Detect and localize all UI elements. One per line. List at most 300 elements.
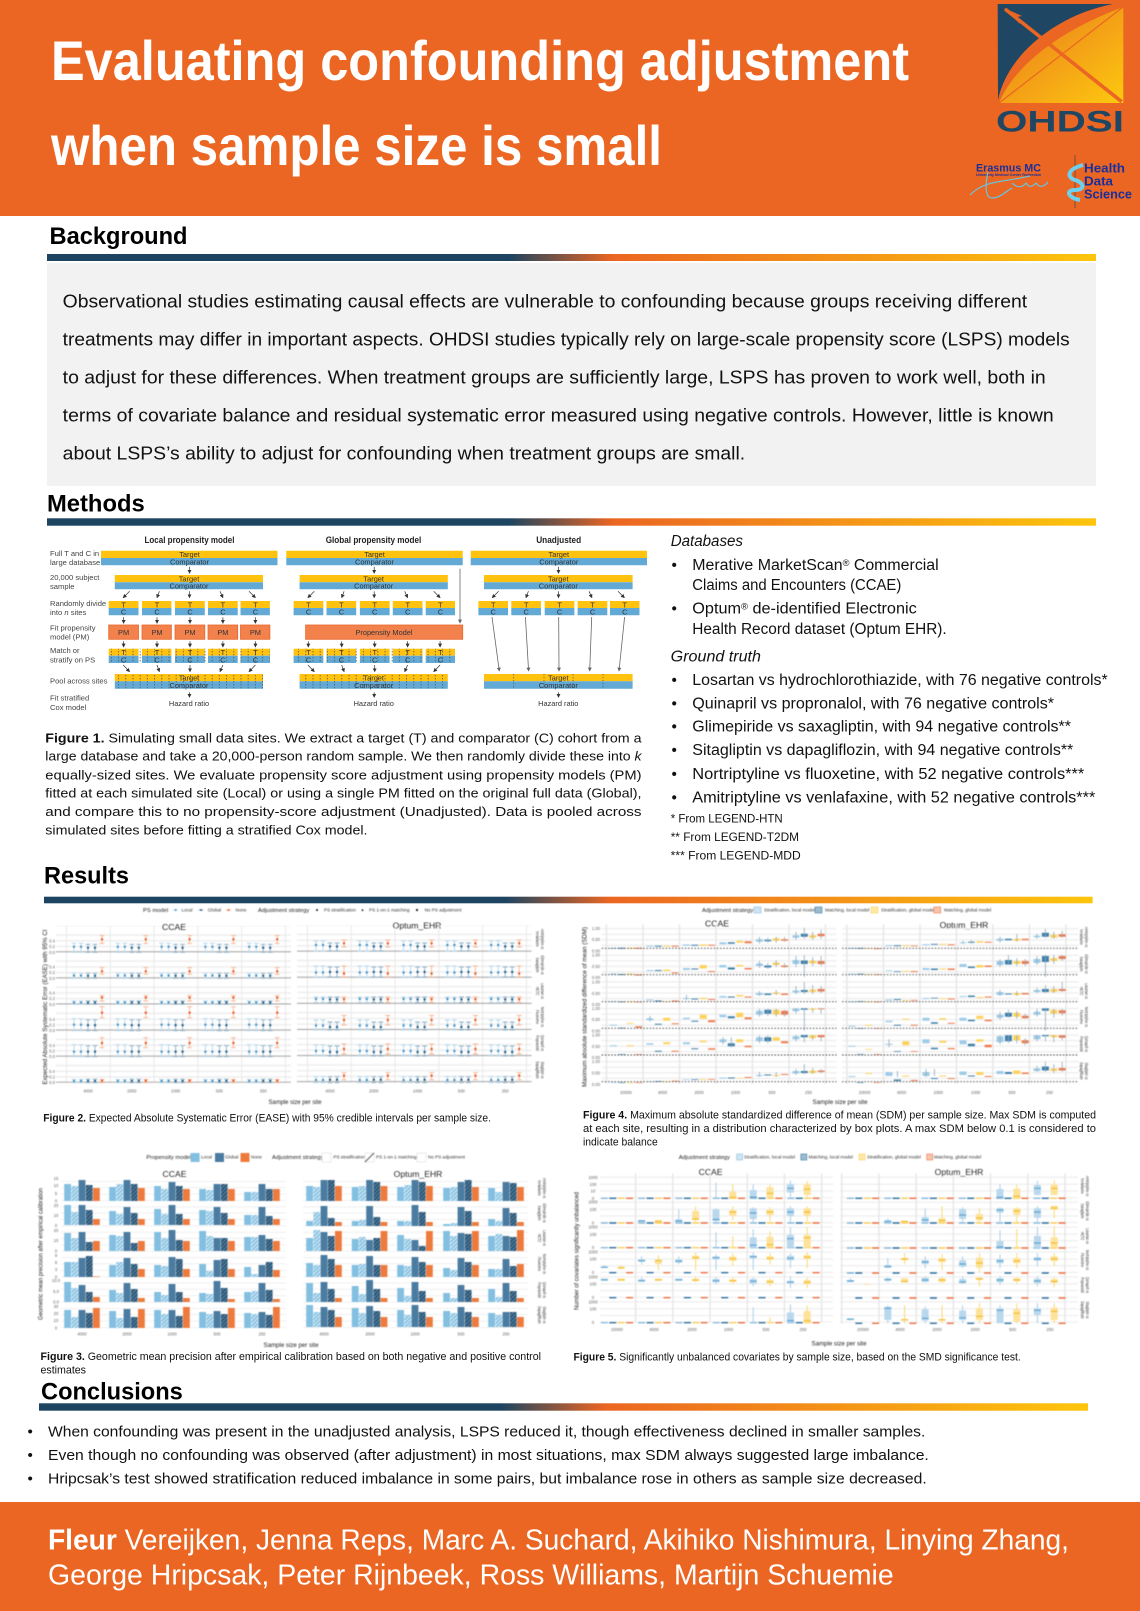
databases and ground truth list: Optum	[692, 601, 738, 618]
axis tick labels: 4000	[897, 1090, 907, 1095]
bar labels: C	[187, 608, 193, 617]
bar labels: Target	[548, 574, 569, 584]
bar labels: Target	[179, 550, 200, 559]
bar labels: T	[405, 648, 410, 657]
axis tick labels: 5.0	[53, 1289, 60, 1294]
bar labels: T	[623, 600, 628, 610]
bar labels: Target	[179, 574, 199, 584]
axis titles: Maximum absolute standardized difference of mean (SDM)	[582, 927, 588, 1087]
axis tick labels: 1000	[588, 1300, 598, 1304]
legend: No PS adjustment	[425, 908, 462, 913]
footer authors: George Hripcsak, Peter Rijnbeek, Ross Williams, Martijn Schuemie	[48, 1559, 894, 1591]
legend: Adjustment strategy	[679, 1155, 730, 1161]
axis tick labels: 4000	[658, 1090, 668, 1095]
facet strip labels: Dapagliflozin	[535, 1061, 540, 1079]
axis tick labels: 0.50	[592, 937, 601, 942]
legend: PS 1-on-1 matching	[369, 908, 410, 913]
panel: background text: terms of covariate balance and residual systematic error measured using negative controls. However, little is known	[63, 404, 1054, 425]
figure 4 caption	[583, 1109, 1096, 1149]
bar labels: C	[372, 608, 378, 617]
figure 3: precision bar chart: Optum_EHR	[394, 1169, 442, 1179]
legend: Matching, local model	[825, 908, 869, 913]
databases and ground truth list: Losartan vs hydrochlorothiazide, with 76 negative controls*	[692, 672, 1108, 689]
logo: Health Data Science	[1069, 155, 1132, 208]
axis tick labels: 0	[592, 1270, 595, 1275]
legend	[143, 908, 462, 914]
facet strip labels	[1079, 927, 1089, 1080]
legend: Global	[208, 908, 221, 913]
axis tick labels: 2000	[934, 1090, 944, 1095]
CCAE boxes	[613, 928, 821, 1083]
facet strip labels: Amitriptyline vs	[1084, 927, 1089, 947]
axis tick labels: 1.00	[592, 926, 601, 931]
axis tick labels: 1000	[171, 1088, 181, 1094]
axis tick labels: 20	[54, 1203, 59, 1208]
axis tick labels: 100	[590, 1232, 597, 1237]
axis tick labels: 0	[55, 1326, 58, 1330]
step labels	[50, 549, 108, 712]
databases and ground truth list: •	[672, 695, 677, 712]
facet strip labels: Amitriptyline vs	[542, 1178, 547, 1198]
axis tick labels: 0.4	[49, 1069, 56, 1074]
conclusions list: •	[28, 1424, 33, 1441]
figure 3 caption	[40, 1351, 541, 1376]
facet titles: CCAE	[162, 922, 186, 932]
facet strip labels: Saxagliptin	[1080, 1204, 1085, 1218]
databases and ground truth list: Health Record dataset (Optum EHR).	[692, 621, 947, 638]
bar labels: T	[339, 600, 344, 610]
axis tick labels: 250	[1046, 1090, 1054, 1095]
facet strip labels: Sitagliptin vs	[542, 1306, 547, 1324]
bar labels: C	[121, 608, 127, 617]
axis titles: Sample size per site	[268, 1099, 322, 1106]
bar labels: Comparator	[169, 681, 209, 690]
panel titles: Unadjusted	[536, 535, 581, 545]
axis titles: Sample size per site	[812, 1099, 868, 1106]
axis tick labels: 0.00	[592, 975, 601, 980]
bar labels: T	[438, 648, 443, 657]
plot backgrounds	[61, 1176, 528, 1328]
axis tick labels: 100	[590, 1306, 597, 1312]
databases and ground truth list: Merative MarketScan	[692, 557, 838, 574]
bar labels: Hazard ratio	[538, 699, 578, 708]
step labels: 20,000 subject	[50, 573, 100, 582]
axis tick labels: 250	[1046, 1327, 1054, 1332]
bar labels: T	[438, 600, 443, 610]
Optum_EHR bars	[310, 1180, 520, 1327]
axis tick labels: 10.0	[52, 1278, 61, 1283]
logo: Health Data Science: Data	[1084, 174, 1114, 188]
legend: Matching, local model	[808, 1155, 853, 1160]
facet strip labels: Amitriptyline vs	[1085, 1176, 1090, 1196]
axis tick labels: 0	[592, 1196, 595, 1201]
axis tick labels: 0.0	[53, 1300, 60, 1304]
bar labels: C	[339, 608, 345, 617]
figure 1 caption: large database and take a 20,000-person random sample. We then randomly divide these into k	[45, 749, 643, 764]
axis tick labels: 10	[54, 1318, 59, 1323]
flow arrows	[123, 567, 625, 697]
bar labels: PM	[250, 628, 261, 637]
databases and ground truth list: •	[672, 601, 677, 618]
step labels: large database	[50, 558, 100, 567]
bar labels: Hazard ratio	[169, 699, 209, 708]
facet strip labels: Losartan vs	[1085, 1228, 1090, 1244]
databases and ground truth list: •	[672, 766, 677, 783]
axis tick labels: 0.4	[49, 964, 56, 970]
legend: Adjustment strategy	[272, 1155, 323, 1161]
axis tick labels: 2000	[122, 1332, 132, 1336]
axis tick labels: 0.2	[49, 1074, 56, 1080]
axis tick labels: 0	[592, 1245, 595, 1250]
facet strip labels: Dapagliflozin	[1079, 1062, 1084, 1080]
axis tick labels: 0.00	[592, 1002, 601, 1007]
facet strip labels: Sitagliptin vs	[1084, 1062, 1089, 1080]
logo: OHDSI	[996, 4, 1124, 138]
logo: Health Data Science: Health	[1084, 162, 1125, 176]
axis titles	[574, 1192, 867, 1348]
axis tick labels: 500	[768, 1090, 776, 1095]
axis tick labels: 0.2	[49, 996, 56, 1001]
axis tick labels: 5	[55, 1191, 58, 1196]
step labels: Randomly divide	[50, 599, 106, 608]
facet titles: CCAE	[705, 918, 729, 928]
bar labels: C	[154, 655, 160, 664]
facet strip labels: Saxagliptin	[1079, 957, 1084, 971]
axis tick labels: 4000	[77, 1332, 87, 1336]
legend: PS stratification	[324, 908, 356, 913]
databases and ground truth list: Quinapril vs propronalol, with 76 negative controls*	[692, 695, 1054, 712]
axis tick labels: 20	[54, 1311, 59, 1316]
CCAE boxes	[601, 1181, 820, 1323]
facet strip labels: Venlafaxine	[1080, 1178, 1085, 1194]
legend	[679, 1154, 981, 1161]
axis tick labels: 1.00	[592, 1032, 601, 1038]
facet strip labels: Glimepiride vs	[1084, 954, 1089, 974]
facet strip labels: HCTZ	[1080, 1232, 1085, 1241]
bar labels: T	[121, 600, 126, 610]
bar labels: T	[253, 600, 258, 610]
axis tick labels: 100	[590, 1182, 597, 1187]
axis tick labels: 1000	[588, 1274, 598, 1280]
axis titles	[38, 1188, 319, 1349]
bar labels: T	[491, 600, 496, 610]
databases and ground truth list: Ground truth	[671, 649, 761, 666]
axis tick labels	[588, 1175, 1054, 1332]
Optum_EHR boxes	[852, 929, 1062, 1083]
bar labels: Comparator	[539, 558, 579, 566]
databases and ground truth list: Databases	[671, 533, 743, 550]
panel titles	[144, 535, 581, 545]
axis tick labels: 1.00	[592, 980, 601, 984]
facet strip labels: Saxagliptin	[535, 958, 540, 972]
axis tick labels: 500	[1009, 1327, 1017, 1332]
legend: PS model	[143, 908, 168, 914]
axis tick labels: 20000	[859, 1090, 871, 1095]
bar labels: Propensity Model	[355, 628, 413, 637]
figure 5 caption: Figure 5. Significantly unbalanced covariates by sample size, based on the SMD significance test.	[574, 1352, 1021, 1364]
panel titles: Local propensity model	[144, 535, 234, 545]
legend: Matching, global model	[934, 1155, 981, 1160]
facet strip labels	[537, 1178, 547, 1324]
axis tick labels: 0.4	[49, 1017, 56, 1022]
axis tick labels: 100	[590, 1282, 597, 1286]
bar labels: T	[155, 600, 160, 610]
bar labels: C	[187, 655, 193, 664]
step labels: Match or	[50, 646, 80, 655]
axis tick labels: 0	[592, 1295, 595, 1300]
axis tick labels: 0.2	[49, 1022, 56, 1028]
databases and ground truth list: * From LEGEND-HTN	[671, 811, 783, 825]
axis tick labels: 500	[458, 1332, 465, 1336]
bar labels: C	[121, 655, 127, 664]
step labels: Fit propensity	[50, 624, 96, 632]
facet strip labels: Propranolol	[535, 1035, 540, 1051]
panel: background text	[47, 263, 1096, 486]
facet strip labels: Venlafaxine	[1079, 929, 1084, 945]
facet strip labels: Venlafaxine	[535, 931, 540, 947]
bar labels: C	[253, 608, 259, 617]
axis tick labels: 250	[260, 1088, 267, 1094]
facet strip labels: Quinapril vs	[540, 1035, 545, 1051]
bar labels: Target	[548, 674, 569, 682]
figure 2: EASE error bars: Optum_EHR	[393, 920, 441, 930]
axis tick labels: 30	[54, 1304, 59, 1309]
step labels: Cox model	[50, 703, 87, 712]
axis tick labels: 2000	[687, 1327, 697, 1332]
title	[50, 29, 909, 177]
databases and ground truth list: Amitriptyline vs venlafaxine, with 52 negative controls***	[692, 789, 1095, 806]
figure 3 caption: Figure 3. Geometric mean precision after empirical calibration based on both negative and positive control	[40, 1351, 541, 1363]
facet strip labels	[1080, 1176, 1090, 1319]
axis tick labels: 0.00	[592, 1055, 601, 1060]
plot backgrounds	[600, 1173, 1078, 1323]
axis tick labels: 0.50	[592, 1017, 601, 1022]
facet strip labels: Glimepiride vs	[542, 1203, 547, 1223]
facet strip labels: Dapagliflozin	[537, 1306, 542, 1324]
bar labels: Comparator	[354, 582, 394, 591]
axis tick labels: 1000	[971, 1090, 981, 1095]
facet strip labels: HCTZ	[537, 1234, 542, 1243]
axis tick labels: 2000	[369, 1088, 379, 1094]
axis tick labels: 500	[216, 1088, 224, 1094]
figure 1 caption	[45, 731, 643, 837]
axis tick labels: 0.00	[592, 948, 601, 954]
axis tick labels: 10	[54, 1238, 59, 1243]
legend	[702, 907, 991, 914]
axis tick labels	[592, 926, 1054, 1095]
axis tick labels: 10	[54, 1183, 59, 1188]
figure 3: precision bar chart	[38, 1153, 547, 1349]
axis titles	[582, 927, 868, 1106]
axis tick labels: 1000	[588, 1200, 598, 1204]
step labels: Fit stratified	[50, 694, 89, 702]
bar labels: Target	[363, 574, 384, 584]
bar labels: Comparator	[539, 582, 578, 591]
axis tick labels: 0.0	[49, 1028, 56, 1033]
bar labels: T	[121, 648, 126, 657]
bar labels: PM	[151, 628, 163, 637]
databases and ground truth list: •	[672, 742, 677, 759]
legend: Global	[225, 1155, 238, 1160]
axis tick labels: 1000	[970, 1327, 980, 1332]
axis titles: Number of covariates significantly unbalanced	[574, 1192, 580, 1310]
conclusions list: Even though no confounding was observed (after adjustment) in most situations, max SDM always suggested large imbalance.	[48, 1447, 929, 1464]
axis tick labels: 0.0	[49, 950, 56, 955]
bar labels: C	[405, 608, 411, 617]
axis tick labels: 1.00	[592, 952, 601, 958]
figure 2: EASE error bars	[42, 908, 545, 1106]
axis tick labels: 3	[55, 1267, 58, 1272]
axis tick labels: 0.2	[49, 1048, 56, 1054]
Optum_EHR error bars	[314, 940, 522, 1083]
legend	[146, 1153, 466, 1162]
bar labels	[118, 550, 628, 708]
facet strip labels: Dapagliflozin	[1080, 1301, 1085, 1319]
bar labels: T	[372, 648, 377, 657]
bar labels: C	[491, 608, 497, 617]
axis tick labels: 1000	[410, 1332, 420, 1336]
axis tick labels: 0.4	[49, 1043, 56, 1048]
databases and ground truth list: •	[672, 672, 677, 689]
conclusions list: •	[28, 1447, 33, 1464]
axis tick labels: 500	[1008, 1090, 1016, 1095]
axis titles: Geometric mean precision after empirical calibration	[38, 1188, 44, 1320]
axis tick labels: 2000	[127, 1088, 137, 1094]
bar labels: C	[306, 608, 312, 617]
axis tick labels: 0.00	[592, 1028, 601, 1034]
figure 2 caption: Figure 2. Expected Absolute Systematic Error (EASE) with 95% credible intervals per sample size.	[43, 1113, 491, 1125]
facet strip labels	[535, 929, 545, 1079]
databases and ground truth list: ®	[741, 602, 748, 612]
bar labels: C	[306, 655, 312, 664]
bar labels: T	[306, 600, 311, 610]
figure 4 caption: Figure 4. Maximum absolute standardized difference of mean (SDM) per sample size. Max SDM is computed	[583, 1109, 1096, 1121]
facet strip labels: HCTZ	[535, 987, 540, 996]
axis tick labels: 0.00	[592, 1082, 601, 1087]
axis tick labels: 2000	[932, 1327, 942, 1332]
axis tick labels: 0.2	[49, 970, 56, 975]
databases and ground truth list: •	[672, 789, 677, 806]
title: Evaluating confounding adjustment	[51, 29, 909, 92]
legend: Matching, global model	[944, 908, 991, 913]
bar labels: Comparator	[170, 558, 210, 566]
bar labels: C	[405, 655, 411, 664]
facet titles: CCAE	[163, 1169, 187, 1179]
axis tick labels: 15	[54, 1176, 59, 1181]
legend: Stratification, local model	[744, 1155, 795, 1160]
heading: Results: Results	[44, 862, 129, 889]
axis tick labels: 10	[54, 1213, 59, 1218]
facet strip labels: Glimepiride vs	[1085, 1201, 1090, 1221]
target and comparator bars	[101, 551, 647, 689]
figure 1 caption: and compare this to no propensity-score adjustment (Unadjusted). Data is pooled across	[45, 804, 642, 819]
axis tick labels: 9	[55, 1253, 58, 1258]
legend: Adjustment strategy	[258, 908, 309, 914]
bar labels: Target	[364, 550, 385, 559]
bar labels: T	[221, 600, 226, 610]
panel: background text: about LSPS’s ability to adjust for confounding when treatment groups are small.	[63, 442, 745, 463]
bar labels: C	[220, 608, 226, 617]
axis titles: Sample size per site	[264, 1342, 319, 1349]
axis tick labels: 1000	[588, 1175, 598, 1180]
facet strip labels: Nortriptyline vs	[540, 1007, 545, 1027]
propensity model boxes	[109, 625, 463, 639]
databases and ground truth list: •	[672, 719, 677, 736]
heading: Methods: Methods	[47, 491, 145, 518]
figure 1: simulation flow diagram	[50, 535, 647, 712]
panel: background text: Observational studies estimating causal effects are vulnerable to confounding because groups receiving different	[63, 290, 1027, 311]
axis tick labels: 10	[591, 1188, 596, 1194]
facet strip labels: Quinapril vs	[1085, 1277, 1090, 1293]
bar labels: T	[253, 648, 258, 657]
panel titles: Global propensity model	[326, 535, 421, 545]
databases and ground truth list: •	[672, 557, 677, 574]
axis tick labels: 500	[762, 1327, 770, 1332]
axis tick labels: 0	[55, 1198, 58, 1204]
facet strip labels: Venlafaxine	[537, 1180, 542, 1196]
plot backgrounds	[602, 924, 1079, 1084]
bar labels: PM	[118, 628, 129, 637]
legend: No PS adjustment	[428, 1155, 466, 1160]
facet strip labels: Nortriptyline vs	[1084, 1007, 1089, 1027]
figure 1 caption: equally-sized sites. We evaluate propensity score adjustment using propensity models (PM)	[45, 767, 642, 782]
axis tick labels: 4000	[325, 1088, 335, 1094]
axis tick labels: 1000	[588, 1250, 598, 1254]
axis tick labels: 20	[54, 1228, 59, 1233]
databases and ground truth list: *** From LEGEND-MDD	[671, 849, 801, 863]
axis tick labels: 250	[258, 1332, 266, 1336]
logo: Erasmus MC: University Medical Center Rotterdam	[976, 173, 1041, 177]
bar labels: Target	[179, 674, 199, 682]
axis tick labels: 2000	[694, 1090, 704, 1095]
axis tick labels: 4000	[649, 1327, 659, 1332]
axis tick labels: 4000	[319, 1332, 329, 1336]
axis tick labels: 1.00	[592, 1006, 601, 1011]
facet strip labels: Glimepiride vs	[540, 955, 545, 975]
axis tick labels: 250	[502, 1332, 510, 1336]
legend: None	[236, 908, 247, 913]
panel: background text: to adjust for these differences. When treatment groups are sufficiently large, LSPS has proven to work well, both in	[63, 366, 1046, 387]
axis tick labels: 0.2	[49, 944, 56, 949]
legend: Stratification, global model	[881, 908, 935, 913]
figure 1 caption: Figure 1. Simulating small data sites. We extract a target (T) and comparator (C) cohort from a	[45, 731, 642, 746]
facet strip labels: Losartan vs	[1084, 983, 1089, 999]
axis tick labels: 250	[800, 1327, 807, 1332]
legend: Propensity model	[146, 1155, 191, 1161]
0.1 balance threshold lines	[602, 948, 1079, 1082]
facet strip labels: Propranolol	[1080, 1277, 1085, 1293]
axis tick labels: 1000	[167, 1332, 177, 1336]
logo: OHDSI: OHDSI	[996, 106, 1124, 138]
axis tick labels: 4000	[895, 1327, 905, 1332]
footer authors: Fleur Vereijken, Jenna Reps, Marc A. Suchard, Akihiko Nishimura, Linying Zhang,	[48, 1524, 1069, 1556]
facet strip labels: Sitagliptin vs	[1085, 1301, 1090, 1319]
databases and ground truth list: ®	[843, 558, 850, 568]
bar labels: Comparator	[539, 681, 578, 690]
bar labels: C	[622, 608, 628, 617]
axis tick labels: 1000	[413, 1088, 423, 1094]
axis tick labels: 250	[805, 1090, 813, 1095]
bar labels: T	[188, 600, 193, 610]
heading: Background: Background	[50, 223, 188, 250]
facet strip labels: Sitagliptin vs	[540, 1061, 545, 1079]
plot backgrounds	[56, 926, 532, 1083]
bar labels: PM	[217, 628, 228, 637]
bar labels: C	[220, 655, 226, 664]
conclusions list: Hripcsak’s test showed stratification reduced imbalance in some pairs, but imbalance rose in others as sample size decreased.	[48, 1470, 927, 1487]
facet strip labels: HCTZ	[1079, 987, 1084, 996]
figure 5: unbalanced covariates box plots	[574, 1154, 1090, 1348]
